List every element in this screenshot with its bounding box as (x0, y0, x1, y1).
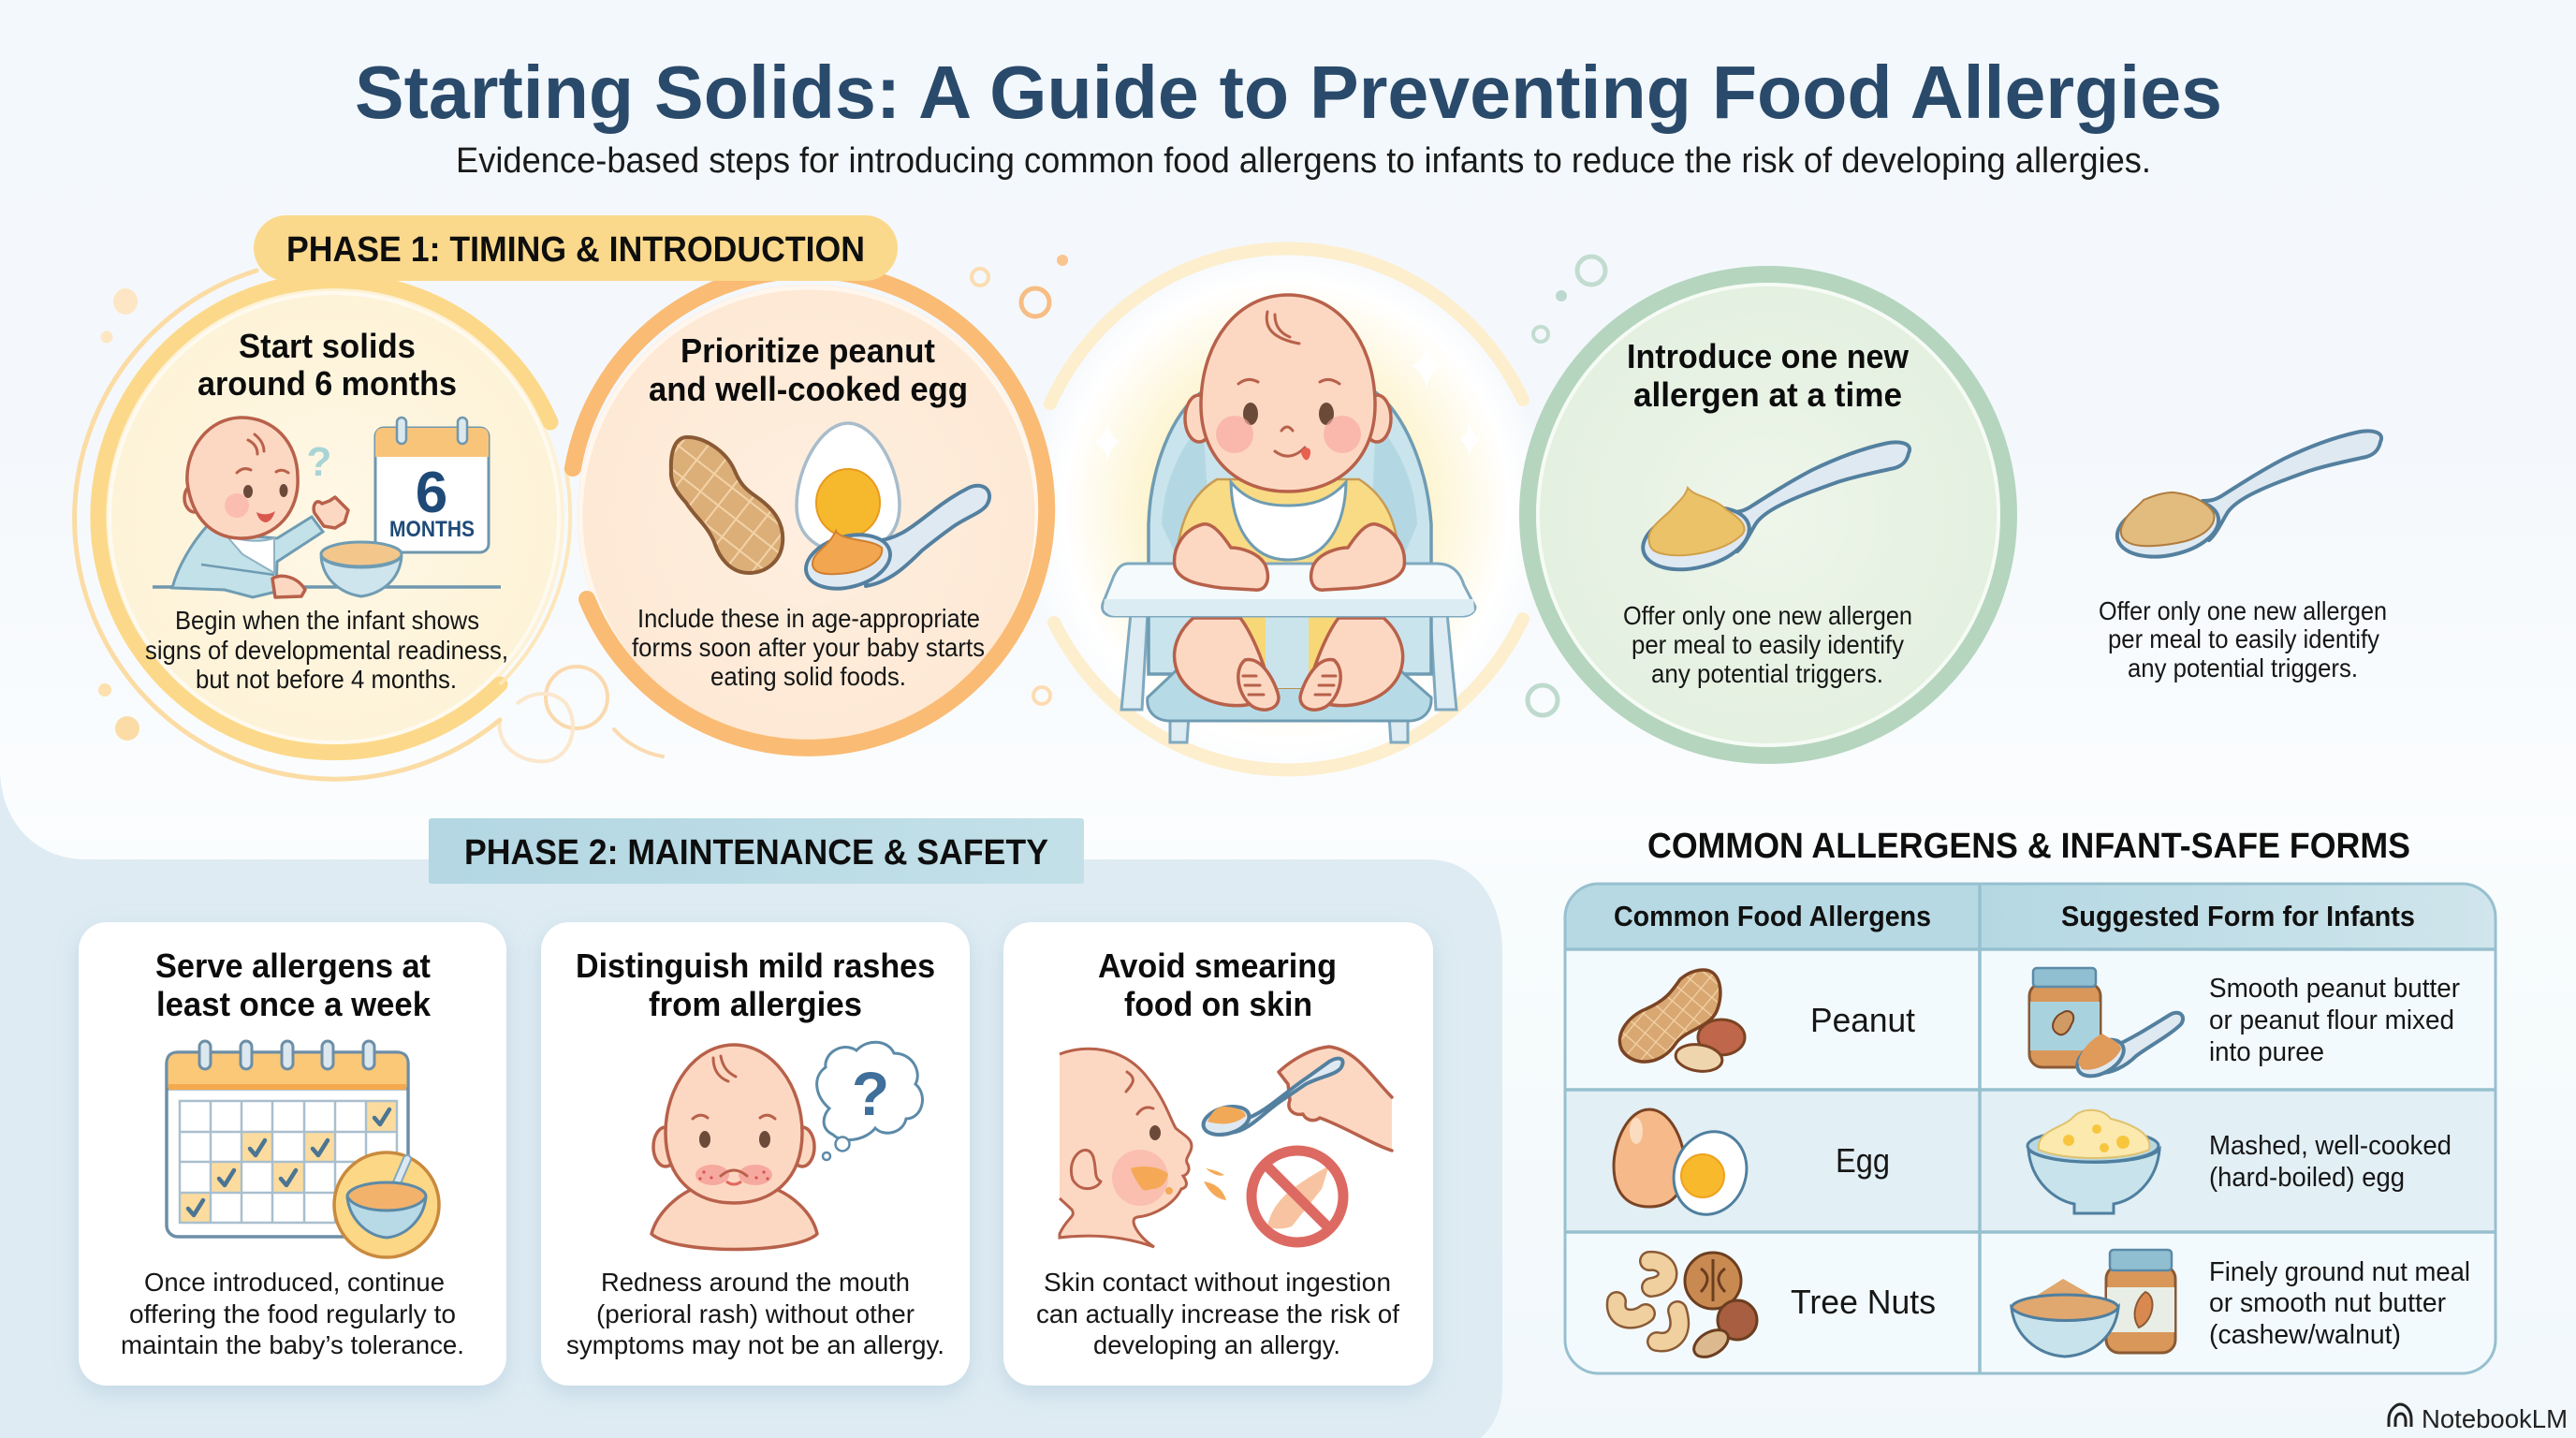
body text: but not before 4 months. (196, 665, 457, 694)
body text: eating solid foods. (710, 662, 906, 691)
heading: food on skin (1124, 985, 1312, 1023)
illustration: calendar with checks and bowl (167, 1041, 439, 1257)
heading: Start solids (239, 327, 416, 365)
icon: no smearing sign (1251, 1151, 1343, 1242)
body text: per meal to easily identify (2108, 624, 2379, 653)
bib (1231, 482, 1346, 560)
feet (1238, 660, 1279, 710)
body text (145, 606, 508, 694)
head (184, 484, 205, 512)
ears (1185, 395, 1213, 442)
body text (1036, 1268, 1399, 1359)
title: Starting Solids: A Guide to Preventing Food Allergies (355, 51, 2222, 134)
heading: Distinguish mild rashes (576, 946, 935, 985)
body text (566, 1268, 944, 1359)
header labels: Suggested Form for Infants (2061, 900, 2415, 932)
body text: symptoms may not be an allergy. (566, 1330, 944, 1359)
body text: Offer only one new allergen (1623, 601, 1912, 630)
calendar: MONTHS (389, 517, 475, 542)
yellow ring (98, 281, 550, 753)
row: tree nuts: Tree Nuts (1791, 1283, 1936, 1321)
head (1201, 295, 1375, 492)
circle fill (578, 285, 1040, 747)
table shading (1565, 884, 2496, 1373)
icon: peanut (671, 437, 783, 573)
icon: nut butter jar and bowl of nut meal (2012, 1250, 2175, 1357)
panel: start solids around 6 months (75, 271, 570, 779)
icon: assorted tree nuts (1617, 1253, 1757, 1362)
table border (1565, 884, 2496, 1373)
halo glow (1025, 241, 1549, 780)
orange ring (573, 271, 1046, 748)
thin closing arc (500, 468, 570, 684)
description: Smooth peanut butter (2209, 974, 2460, 1004)
sparkles (1095, 344, 1479, 462)
table heading: COMMON ALLERGENS & INFANT-SAFE FORMS (1647, 827, 2410, 866)
heading (1627, 337, 1910, 414)
icon: peanut butter jar and spoon (2029, 968, 2183, 1083)
decorative dots and rings (98, 255, 1605, 761)
illustration: baby profile with food on cheek (1060, 1049, 1226, 1247)
body text (632, 604, 985, 691)
seat (1148, 666, 1431, 721)
body text (1623, 601, 1912, 688)
circle fill (104, 287, 564, 748)
NotebookLM logo: NotebookLM (2422, 1404, 2568, 1433)
body text: maintain the baby’s tolerance. (121, 1330, 464, 1359)
panel: repeated spoon note (2099, 431, 2387, 682)
heading: Avoid smearing (1098, 946, 1337, 985)
phase 2 label (429, 818, 1084, 884)
row: egg: Egg (1836, 1141, 1890, 1180)
row: peanut (1619, 968, 2460, 1083)
card: distinguish mild rashes (541, 922, 970, 1386)
header labels (1614, 900, 2415, 932)
baby body (172, 517, 323, 597)
description: Finely ground nut meal (2209, 1257, 2470, 1287)
tray (1103, 564, 1475, 616)
icon: boiled egg (797, 423, 900, 552)
high chair legs (1121, 613, 1456, 742)
heading (649, 331, 968, 408)
description: or peanut flour mixed (2209, 1005, 2454, 1035)
body text: Begin when the infant shows (175, 606, 479, 635)
body text: forms soon after your baby starts (632, 633, 985, 662)
panel: introduce one new allergen (1528, 274, 2009, 756)
heading: Prioritize peanut (681, 331, 935, 370)
face (1243, 403, 1258, 425)
row: egg (1614, 1109, 2452, 1225)
description (2209, 1131, 2452, 1193)
body text: (perioral rash) without other (596, 1299, 915, 1328)
green ring (1528, 274, 2009, 756)
body text: any potential triggers. (2128, 653, 2358, 682)
description: or smooth nut butter (2209, 1288, 2446, 1318)
inner white ring (1538, 285, 1998, 745)
body text: any potential triggers. (1651, 659, 1883, 688)
card: serve allergens weekly (79, 922, 506, 1386)
icon: spoon with ground nut meal (2112, 431, 2381, 565)
phase 2 label: PHASE 2: MAINTENANCE & SAFETY (464, 833, 1048, 873)
inner white ring (110, 293, 559, 742)
illustration: baby reaching for bowl with calendar (153, 418, 501, 597)
icon: spoon with yellow puree (1636, 442, 1910, 580)
calendar: 6 (416, 461, 447, 525)
inner white ring (580, 287, 1037, 744)
yellow shirt (1178, 479, 1398, 580)
heading (1098, 946, 1337, 1023)
thin outer ring (75, 271, 500, 779)
thought cloud with question mark: ? (852, 1059, 889, 1128)
halo arcs (1050, 248, 1523, 770)
arms (1175, 524, 1267, 590)
yellow romper bottom (1226, 613, 1348, 688)
body text: Once introduced, continue (144, 1268, 445, 1297)
description (2209, 1257, 2470, 1350)
body text (2099, 596, 2387, 682)
question mark: ? (307, 439, 331, 485)
icon: peanut and nuts (1619, 970, 1745, 1074)
panel: phase 2 background (0, 772, 1502, 1438)
illustration: hand holding spoon (1200, 1047, 1392, 1151)
heading: Introduce one new (1627, 337, 1910, 375)
icon: bowl of mashed egg (2027, 1110, 2159, 1213)
description: into puree (2209, 1037, 2324, 1067)
heading: from allergies (649, 985, 862, 1023)
subtitle: Evidence-based steps for introducing common food allergens to infants to reduce the risk of developing allergies. (456, 141, 2151, 181)
phase 1 label (254, 215, 898, 281)
heading (576, 946, 935, 1023)
high chair back (1149, 391, 1431, 674)
circle fill (1534, 281, 2002, 749)
panel: center baby in high chair (1025, 241, 1549, 780)
body text: Include these in age-appropriate (637, 604, 980, 633)
description: (hard-boiled) egg (2209, 1163, 2405, 1193)
panel: prioritize peanut and egg (573, 271, 1046, 748)
body text: Skin contact without ingestion (1044, 1268, 1391, 1297)
icon: spoon with peanut puree (800, 486, 989, 597)
calendar (375, 418, 489, 552)
heading: allergen at a time (1633, 375, 1902, 414)
thought cloud with question mark (817, 1042, 922, 1160)
bowl (321, 542, 402, 566)
hair curl (1266, 312, 1299, 344)
card: avoid smearing food on skin (1003, 922, 1433, 1386)
description: (cashew/walnut) (2209, 1320, 2401, 1350)
body text: signs of developmental readiness, (145, 636, 508, 665)
row: peanut: Peanut (1810, 1001, 1915, 1039)
phase 1 label: PHASE 1: TIMING & INTRODUCTION (286, 230, 865, 270)
heading: and well-cooked egg (649, 370, 968, 408)
body text: offering the food regularly to (129, 1299, 456, 1328)
illustration: baby with perioral rash (651, 1045, 817, 1249)
description: Mashed, well-cooked (2209, 1131, 2452, 1161)
body text: can actually increase the risk of (1036, 1299, 1399, 1328)
icon: whole and halved egg (1614, 1109, 1758, 1225)
header labels: Common Food Allergens (1614, 900, 1931, 932)
heading (155, 946, 432, 1023)
thighs (1175, 618, 1273, 706)
body text: Offer only one new allergen (2099, 596, 2387, 625)
heading (198, 327, 457, 403)
heading: least once a week (156, 985, 432, 1023)
hands (272, 576, 305, 597)
body text: Redness around the mouth (601, 1268, 910, 1297)
body text (121, 1268, 464, 1359)
body text: per meal to easily identify (1632, 630, 1904, 659)
heading: Serve allergens at (155, 946, 431, 985)
row: tree nuts (1617, 1250, 2470, 1362)
heading: around 6 months (198, 364, 457, 403)
description (2209, 974, 2460, 1067)
body text: developing an allergy. (1093, 1330, 1340, 1359)
table: allergens and infant-safe forms (1565, 884, 2496, 1373)
